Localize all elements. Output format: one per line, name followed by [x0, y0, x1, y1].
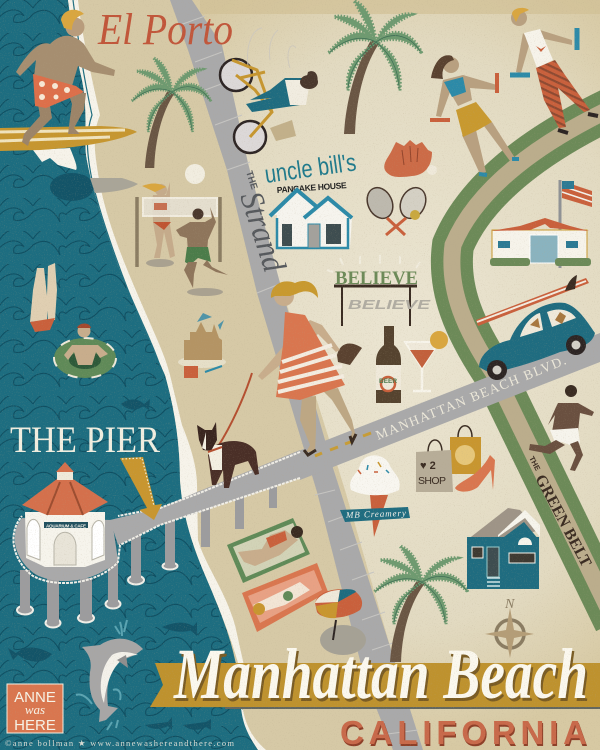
martini glass	[405, 331, 448, 391]
subtitle: California: CALIFORNIA	[340, 714, 587, 750]
beer bottle: BEER	[379, 378, 397, 385]
head	[66, 18, 84, 36]
uncle bill's pancake house: PANCAKE HOUSE	[276, 180, 347, 195]
logo: anne was here: HERE	[14, 717, 56, 734]
pier label: THE PIER	[10, 420, 160, 461]
woman in striped pants with dumbbells	[510, 8, 598, 133]
compass rose: N	[504, 597, 515, 612]
torso and arms	[16, 36, 115, 86]
beach sand strip	[70, 0, 420, 750]
fish	[8, 399, 211, 730]
baseball glove	[384, 140, 437, 177]
torso and arms	[436, 75, 497, 117]
logo: anne was here: ANNE	[14, 689, 56, 706]
swimmer diving legs	[30, 263, 57, 332]
sand castle	[178, 313, 226, 378]
manhattan beach blvd road	[296, 333, 600, 480]
uncle bill's pancake house: uncle bill's	[263, 148, 358, 189]
shopping bags and shoe: SHOP	[418, 475, 446, 487]
logo: anne was here	[7, 684, 63, 734]
compass rose	[485, 597, 534, 658]
boston terrier dog	[197, 422, 259, 488]
pier building: AQUARIUM & CAFE	[46, 524, 86, 528]
vw beetle with surfboard	[476, 275, 595, 380]
legs	[22, 104, 52, 146]
ice cream cone: MB Creamery	[345, 508, 406, 520]
runner	[529, 385, 594, 471]
arm	[258, 320, 340, 380]
dog leash	[217, 373, 252, 448]
swimmer in inner tube	[54, 324, 116, 378]
net	[143, 198, 217, 216]
palm tree 2	[328, 1, 422, 134]
body	[479, 303, 595, 373]
dog walker woman	[258, 281, 356, 455]
rear wheel	[234, 121, 266, 153]
pier building	[22, 462, 108, 567]
the strand road	[170, 0, 423, 750]
pier walkway	[13, 450, 300, 583]
the strand label: Strand	[232, 187, 292, 277]
banner	[150, 663, 600, 708]
blue beach house	[467, 508, 540, 589]
ocean	[0, 0, 258, 750]
place label: El Porto: El Porto	[97, 5, 233, 54]
surfboard	[476, 278, 589, 326]
man player	[176, 207, 216, 252]
sand top edge	[200, 0, 600, 14]
shopping bags and shoe	[416, 426, 495, 492]
dolphin	[76, 620, 143, 730]
the strand label: THE	[243, 170, 259, 191]
tennis rackets	[362, 183, 431, 235]
blvd label: MANHATTAN BEACH BLVD.	[374, 352, 569, 443]
wave foam	[33, 148, 77, 170]
dress	[276, 312, 345, 400]
believe sign	[327, 255, 430, 326]
pointer arrow	[120, 457, 162, 520]
ranch house	[490, 218, 591, 266]
legs	[300, 388, 356, 452]
rider	[246, 78, 305, 112]
shopping bags and shoe: ♥ 2	[420, 460, 436, 472]
ice cream cone	[340, 455, 410, 537]
believe sign: BELIEVE	[335, 268, 418, 289]
foam shoreline	[68, 0, 266, 750]
logo: anne was here: was	[25, 702, 45, 717]
believe sign: BELIEVE	[348, 297, 430, 312]
pillars	[17, 480, 277, 628]
surfboard shadow	[50, 173, 138, 201]
ball	[185, 164, 205, 184]
green belt label: THE	[527, 455, 542, 472]
basket	[270, 120, 296, 141]
shorts	[33, 74, 84, 108]
palm tree 3	[374, 546, 468, 662]
purse	[337, 344, 362, 365]
surfer	[0, 10, 137, 170]
posts	[137, 197, 220, 267]
american flag	[560, 180, 592, 268]
green belt label: GREEN BELT	[531, 472, 595, 570]
surfboard	[0, 126, 137, 151]
legs	[462, 122, 515, 174]
front wheel	[220, 59, 252, 91]
woman with dumbbells	[430, 55, 519, 175]
footer credit: ©anne bollman ★ www.annewashereandthere.com	[5, 738, 234, 748]
towels and sunbathers	[227, 518, 328, 632]
woman player	[152, 182, 175, 258]
beer bottle	[376, 326, 401, 403]
bicycle	[220, 28, 318, 153]
volleyball game	[137, 164, 228, 296]
uncle bill's pancake house	[263, 148, 358, 248]
beach umbrella	[315, 589, 366, 655]
green belt path	[452, 108, 600, 622]
head and hair	[274, 286, 294, 306]
palm tree 1	[131, 58, 211, 168]
